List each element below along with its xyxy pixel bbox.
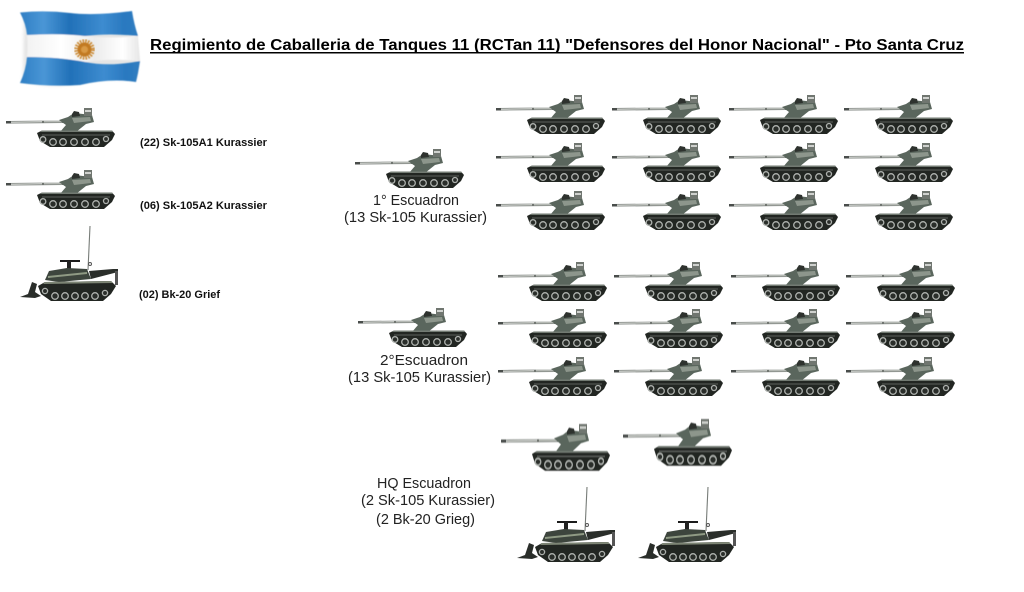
legend label: Bk-20: (02) Bk-20 Grief	[139, 289, 220, 301]
panel: HQ Escuadron	[361, 419, 736, 562]
label: 1° Escuadron: 1° Escuadron	[373, 193, 459, 209]
label: 13 Sk-105: (13 Sk-105 Kurassier)	[344, 210, 487, 226]
legend label: Sk-105A2: (06) Sk-105A2 Kurassier	[140, 200, 268, 212]
commander tank 1° Escuadron	[355, 149, 464, 188]
legend: vehicle types	[6, 108, 268, 301]
tank grid 2° Escuadron	[498, 262, 955, 396]
HQ Sk-105 tanks	[501, 419, 732, 471]
label: 2° Escuadron: 2°Escuadron	[380, 353, 468, 369]
panel: 1° Escuadron	[344, 95, 953, 230]
tank grid 1° Escuadron	[496, 95, 953, 230]
legend item: Sk-105A2 tank	[6, 170, 115, 209]
icon: Argentine flag	[20, 11, 140, 86]
legend label: Sk-105A1: (22) Sk-105A1 Kurassier	[140, 137, 268, 149]
title: Regimiento de Caballeria de Tanques 11 (RCTan 11) "Defensores del Honor Nacional" - Pto Santa Cruz	[150, 37, 964, 54]
legend item: Sk-105A1 tank	[6, 108, 115, 147]
icon: sun of May	[76, 41, 93, 58]
commander tank 2° Escuadron	[358, 308, 467, 347]
label: 13 Sk-105: (13 Sk-105 Kurassier)	[348, 370, 491, 386]
legend item: Bk-20 recovery vehicle	[20, 226, 118, 301]
label: HQ Escuadron: HQ Escuadron	[377, 476, 471, 492]
panel: 2° Escuadron	[348, 262, 955, 396]
label: 2 Sk-105: (2 Sk-105 Kurassier)	[361, 493, 495, 509]
HQ Bk-20 vehicles	[517, 487, 736, 562]
label: 2 Bk-20: (2 Bk-20 Grieg)	[376, 512, 475, 528]
